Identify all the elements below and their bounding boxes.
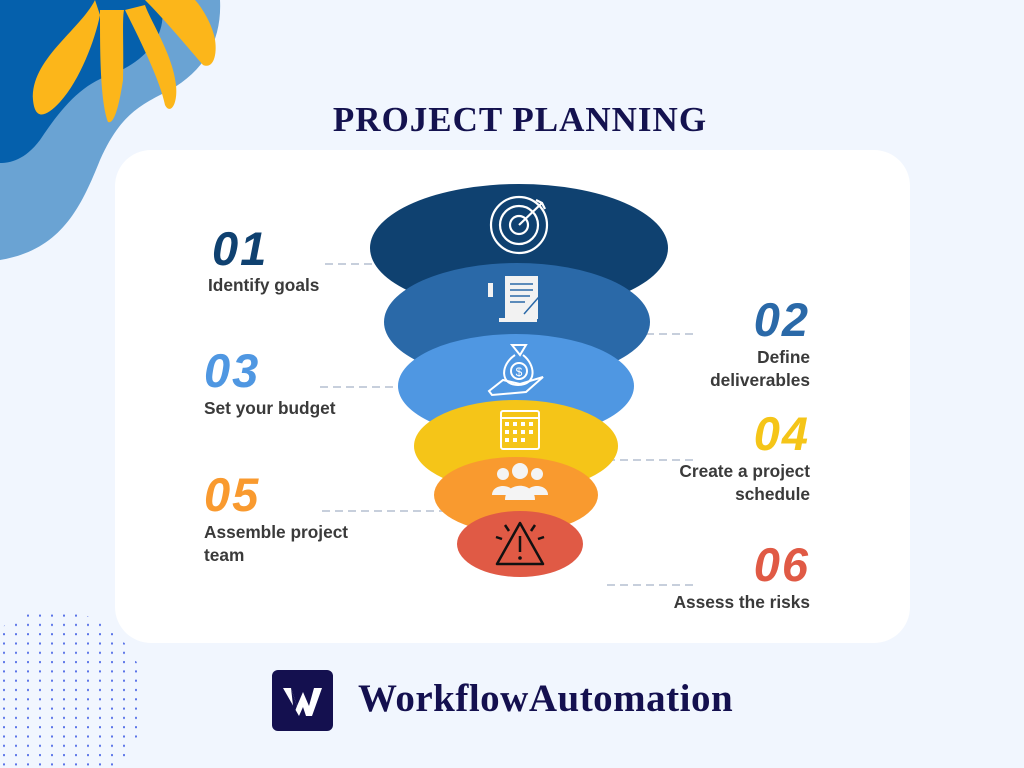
step 06: 06	[754, 538, 810, 591]
panel: main card	[115, 150, 910, 643]
decoration: top-left blobs and flower	[0, 0, 220, 260]
step 05: Assemble project	[204, 522, 348, 542]
step 02	[710, 293, 810, 390]
step 02: 02	[754, 293, 810, 346]
step 06	[674, 538, 810, 612]
step 04: schedule	[735, 484, 810, 504]
step 04	[679, 407, 810, 504]
icon: team	[492, 463, 548, 500]
step 01	[208, 222, 319, 295]
step 05	[204, 468, 348, 565]
step 02: Define	[757, 347, 810, 367]
step 03: Set your budget	[204, 398, 336, 418]
step 06: Assess the risks	[674, 592, 810, 612]
decoration: dot grid	[3, 614, 137, 766]
step 02: deliverables	[710, 370, 810, 390]
title: PROJECT PLANNING	[333, 100, 707, 139]
logo	[272, 670, 733, 731]
icon: money bag	[489, 345, 543, 395]
step 05: team	[204, 545, 244, 565]
icon: warning	[496, 523, 544, 564]
step 04: Create a project	[679, 461, 810, 481]
step 01: 01	[212, 222, 268, 275]
icon: logo mark	[272, 670, 333, 731]
step 04: 04	[754, 407, 810, 460]
icon: target	[491, 197, 547, 253]
step 03: 03	[204, 344, 260, 397]
step 05: 05	[204, 468, 260, 521]
step 01: Identify goals	[208, 275, 319, 295]
brand name: WorkflowAutomation	[358, 677, 733, 720]
step 03	[204, 344, 336, 418]
funnel chart: $	[516, 365, 523, 379]
icon: document	[488, 276, 538, 322]
connector lines	[320, 264, 693, 585]
icon: calendar	[501, 411, 539, 449]
